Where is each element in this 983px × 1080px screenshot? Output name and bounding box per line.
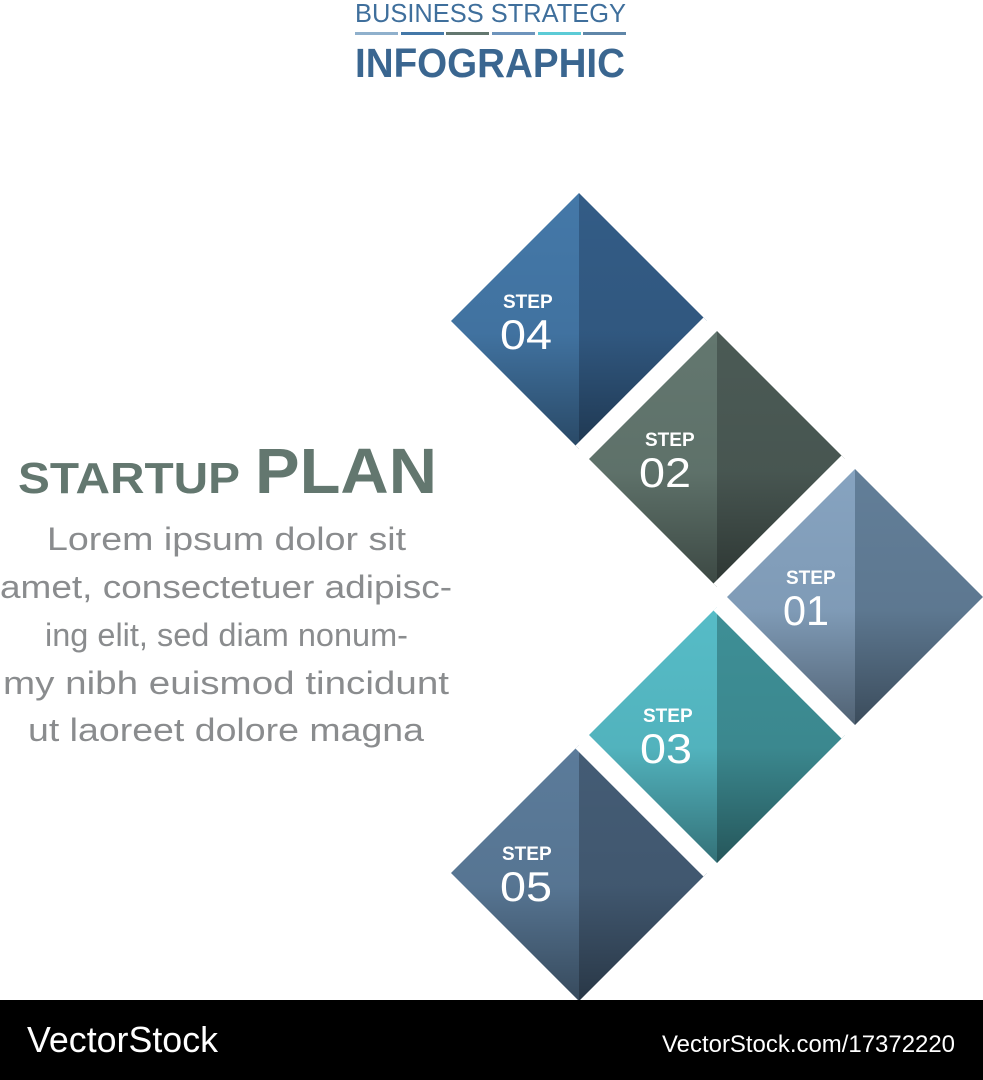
- diamond: step 03: STEP: [643, 706, 693, 727]
- diamond: step 02: STEP: [645, 430, 695, 451]
- diamond: step 02: [589, 331, 845, 587]
- heading: startup plan: STARTUP: [18, 454, 240, 503]
- text block: Lorem ipsum dolor sit: [47, 521, 406, 557]
- text block: ing elit, sed diam nonum-: [45, 617, 408, 653]
- diamond: step 01: 01: [783, 587, 829, 634]
- text block: ut laoreet dolore magna: [28, 712, 424, 748]
- title: INFOGRAPHIC: [355, 40, 625, 86]
- diamond: step 01: STEP: [786, 568, 836, 589]
- text block: amet, consectetuer adipisc-: [0, 569, 452, 605]
- diamond: step 05: STEP: [502, 844, 552, 865]
- diamond: step 03: 03: [640, 725, 692, 772]
- diamond: step 05: 05: [500, 863, 552, 910]
- text block: [0, 521, 452, 748]
- diamond: step 05: [451, 745, 707, 1001]
- diamond: step 03: [589, 607, 845, 863]
- diamond: step 04: 04: [500, 311, 552, 358]
- heading: startup plan: [18, 435, 437, 507]
- title: [355, 0, 626, 86]
- heading: startup plan: PLAN: [255, 435, 437, 507]
- diamond: step 02: 02: [639, 449, 691, 496]
- footer: VectorStock.com/17372220: [662, 1031, 955, 1058]
- text block: my nibh euismod tincidunt: [3, 665, 449, 701]
- footer: [0, 1000, 983, 1080]
- gaps between diamonds: [579, 321, 845, 873]
- diamond: step 04: [451, 193, 707, 449]
- diamond: step 04: STEP: [503, 292, 553, 313]
- diamond: step 01: [727, 469, 983, 725]
- footer: VectorStock: [27, 1019, 219, 1060]
